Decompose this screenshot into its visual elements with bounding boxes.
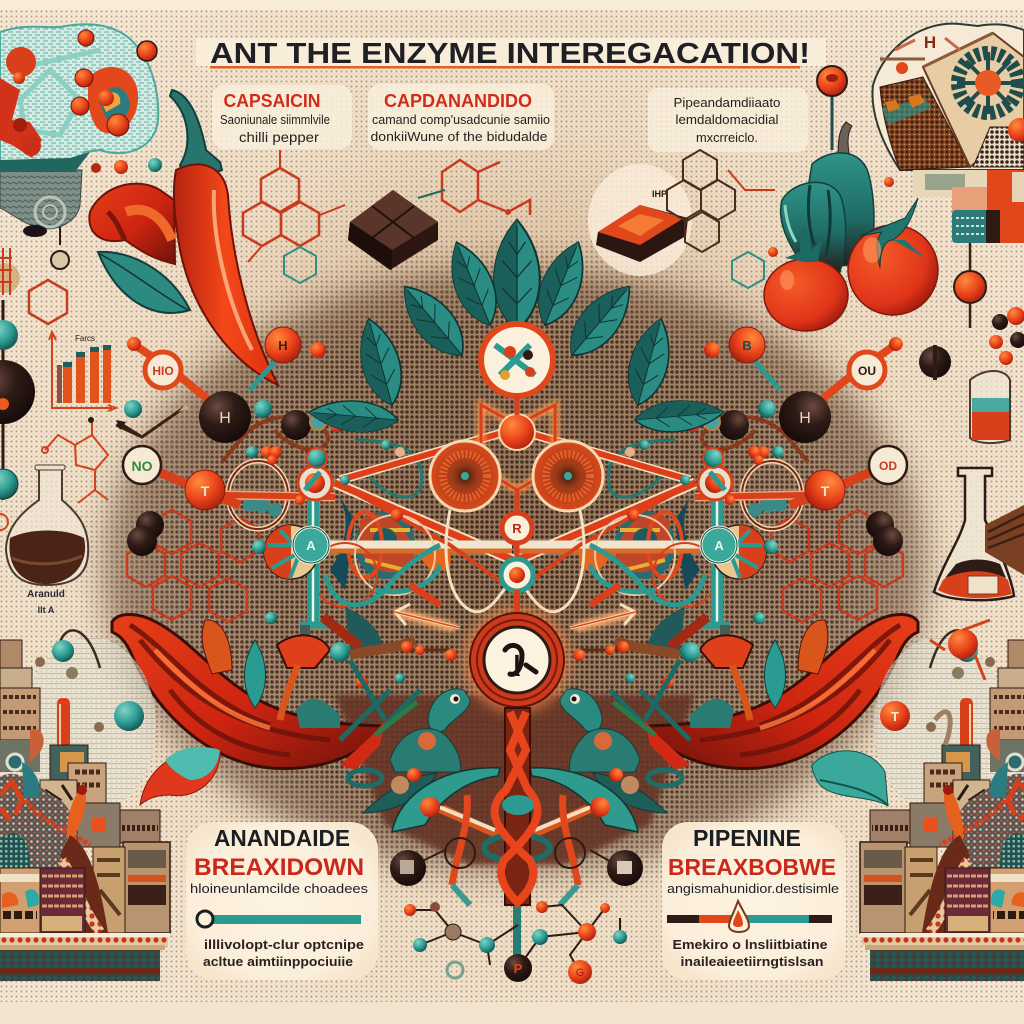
lower stalks and caps [202, 607, 457, 740]
teal vertical strut [307, 495, 319, 625]
node labels in network: B [742, 338, 752, 353]
node labels in network: NO [132, 458, 153, 474]
panel: pipenine breakbobwe: PIPENINE [693, 825, 801, 851]
label: flask: Aranuld [27, 589, 65, 600]
icon: orange chocolate block [588, 164, 692, 276]
panel: pipenine breakbobwe: BREAXBOBWE [668, 854, 836, 880]
enzyme core: rings and glowing frame: R [512, 521, 522, 536]
icon: right book stack [985, 505, 1024, 575]
label: flask: IIt A [38, 605, 55, 615]
icon: orange chocolate block: IHP [652, 189, 667, 199]
panel: pipenine breakbobwe: Emekiro o lnsliitbiatine [672, 938, 828, 952]
central helix stem [484, 708, 550, 960]
network: left half of molecule web [0, 327, 515, 981]
panel: anandaide breakdown: hloineunlamcilde choadees [190, 881, 369, 896]
text block: capsaicin: CAPSAICIN [224, 91, 320, 111]
network: mirrored right half of molecule web [515, 327, 1024, 981]
red main bars [335, 483, 513, 560]
icon: central leaves [308, 220, 725, 435]
progress bar with drop [667, 901, 832, 932]
text block: piperine note: lemdaldomacidial [676, 113, 778, 127]
node labels in network: HIO [152, 364, 174, 378]
icon: top-right map dial: H [924, 33, 936, 52]
central enzyme circle: ι [513, 641, 521, 685]
node labels in network: OD [879, 459, 897, 473]
text block: piperine note [648, 88, 808, 152]
lower molecule network: G [576, 967, 584, 979]
central emblem circle [478, 321, 556, 399]
text block: capsaicin [212, 85, 352, 149]
icon: right orange sprig: T [891, 709, 899, 724]
network: left half of molecule web: T [201, 483, 210, 499]
icon: left dark ball chain [0, 300, 142, 530]
glow arrow [395, 604, 460, 628]
icon: right beaker [970, 371, 1010, 443]
icon: round-bottom flask [6, 465, 88, 585]
text block: capsaicin: Saoniunale siimmlvile [220, 113, 330, 127]
panel: anandaide breakdown: BREAXIDOWN [194, 854, 364, 881]
panel: anandaide breakdown: illlivolopt-clur optcnipe [204, 938, 364, 952]
molecule: left red structure [42, 417, 108, 503]
progress bar: anandaide [197, 911, 361, 927]
panel: pipenine breakbobwe: angismahunidior.destisimle [667, 881, 839, 896]
node labels in network: H [219, 410, 231, 427]
text block: capsaicin: chilli pepper [239, 130, 320, 145]
text block: piperine note: mxcrreiclo. [696, 131, 758, 145]
text block: capdanandido: donkiiWune of the bidudalde [370, 129, 548, 144]
molecule: upper centre [418, 160, 530, 215]
icon: main chili pepper [170, 90, 278, 385]
fan node [264, 525, 329, 579]
panel: pipenine breakbobwe [662, 822, 846, 980]
label: flask [27, 589, 65, 615]
molecule: upper left hexagons [29, 150, 345, 324]
icon: left black bond [116, 405, 190, 437]
icon: top-left brain machine [0, 24, 162, 295]
lower molecule network: P [514, 961, 523, 976]
title: ANT THE ENZYME INTEREGACATION! [210, 38, 810, 70]
big dried chili [112, 614, 382, 769]
icon: top-right map dial [872, 24, 1024, 328]
node labels in network: OU [858, 364, 876, 378]
icon: top orange ball on stem [817, 66, 847, 150]
text block: piperine note: Pipeandamdiiaato [674, 96, 781, 110]
icon: left leaf balloon [140, 747, 220, 805]
icons: left small balls [114, 701, 144, 731]
icon: right molecule cluster [768, 177, 1024, 380]
chart: bar chart [49, 332, 116, 411]
icon: right conical flask [934, 468, 1014, 600]
chart: bar chart: Farcs [75, 334, 95, 343]
node labels in network: H [278, 338, 288, 353]
building stack [0, 630, 170, 981]
text block: capdanandido: CAPDANANDIDO [384, 91, 532, 111]
icon: green bell pepper [781, 122, 874, 275]
beak shapes and lower leaves [340, 689, 500, 905]
enzyme core: rings and glowing frame [430, 395, 603, 591]
ring node [298, 466, 332, 500]
icon: dark chocolate block [348, 190, 438, 270]
molecule: upper right [667, 150, 775, 288]
panel: anandaide breakdown: ANANDAIDE [214, 825, 350, 851]
panel: anandaide breakdown: acltue aimtiinppociuiie [203, 955, 353, 969]
coil loops [222, 417, 422, 529]
icon: right leaf balloon [812, 751, 888, 806]
lower molecule network [390, 850, 643, 984]
panel: pipenine breakbobwe: inaileaieetiirngtislsan [680, 955, 824, 969]
node labels in network: H [799, 410, 811, 427]
icon: small dried pepper and leaf [89, 184, 190, 313]
fan node: A [306, 538, 316, 553]
text block: capdanandido [368, 84, 554, 150]
text block: capdanandido: camand comp'usadcunie samiio [372, 112, 550, 127]
node labels in network [132, 338, 897, 474]
icon: tomatoes [764, 198, 938, 331]
panel: anandaide breakdown [186, 822, 378, 980]
icon: right orange sprig [880, 620, 990, 745]
central enzyme circle [465, 590, 569, 712]
teal and colour mechanism behind bars [330, 490, 451, 590]
